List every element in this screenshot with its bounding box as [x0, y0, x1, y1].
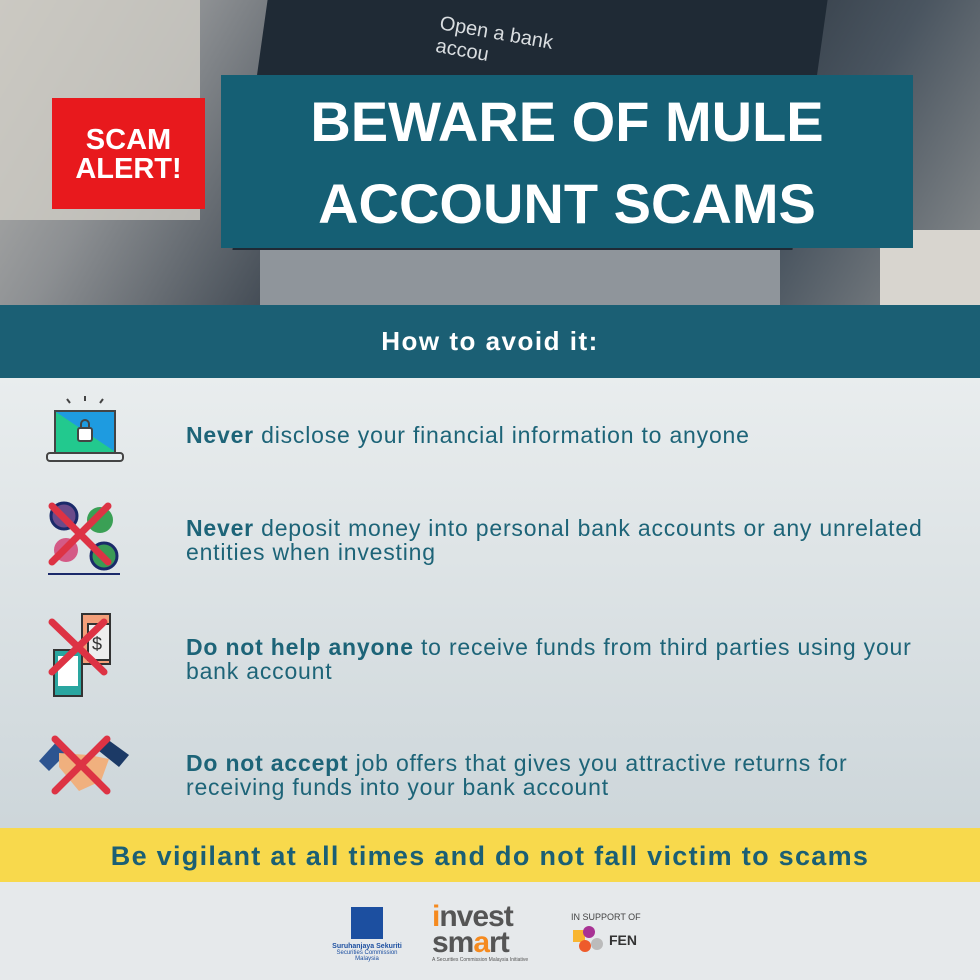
icon: crossed globes: [48, 502, 120, 575]
scam alert badge: [52, 98, 205, 209]
icon: crossed phone transfer: $: [92, 634, 102, 654]
logo: investsmart: A Securities Commission Malaysia Initiative: [432, 957, 528, 963]
scam alert badge: ALERT!: [75, 153, 182, 185]
header photo background: accou: [434, 35, 490, 66]
logo: FEN: [571, 912, 641, 952]
text: tip 1: Never disclose your financial information to anyone: [186, 422, 750, 448]
logo: SC: [332, 907, 402, 962]
yellow banner: Be vigilant at all times and do not fall victim to scams: [111, 841, 869, 871]
text: tip 2: Never deposit money into personal bank accounts or any unrelated entities when investing: [186, 515, 923, 565]
icon: laptop lock: [46, 396, 124, 462]
logo: FEN: FEN: [609, 932, 637, 948]
footer logos: [0, 882, 980, 980]
logo: investsmart: invest: [432, 900, 513, 933]
text: tip 4: Do not accept job offers that gives you attractive returns for receiving funds into your bank account: [186, 750, 847, 800]
logo: SC: Securities Commission: [336, 950, 398, 956]
title: [221, 75, 913, 248]
header photo background: [0, 0, 980, 305]
body panel: [0, 378, 980, 828]
title: ACCOUNT SCAMS: [318, 172, 816, 235]
yellow banner: [0, 828, 980, 882]
subheading band: [0, 305, 980, 378]
logo: SC: Malaysia: [355, 956, 379, 962]
title: BEWARE OF MULE: [310, 90, 824, 153]
logo: FEN: IN SUPPORT OF: [571, 912, 641, 922]
scam alert badge: SCAM: [86, 124, 171, 156]
subheading band: How to avoid it:: [381, 326, 599, 356]
logo: SC: Suruhanjaya Sekuriti: [332, 943, 402, 950]
logo: investsmart: smart: [432, 926, 509, 959]
text: tip 3: Do not help anyone to receive funds from third parties using your bank account: [186, 634, 912, 684]
icon: crossed phone transfer: [48, 613, 111, 697]
icon: crossed handshake: [39, 736, 129, 794]
logo: investsmart: [432, 900, 528, 963]
header photo background: Open a bank: [438, 12, 555, 54]
